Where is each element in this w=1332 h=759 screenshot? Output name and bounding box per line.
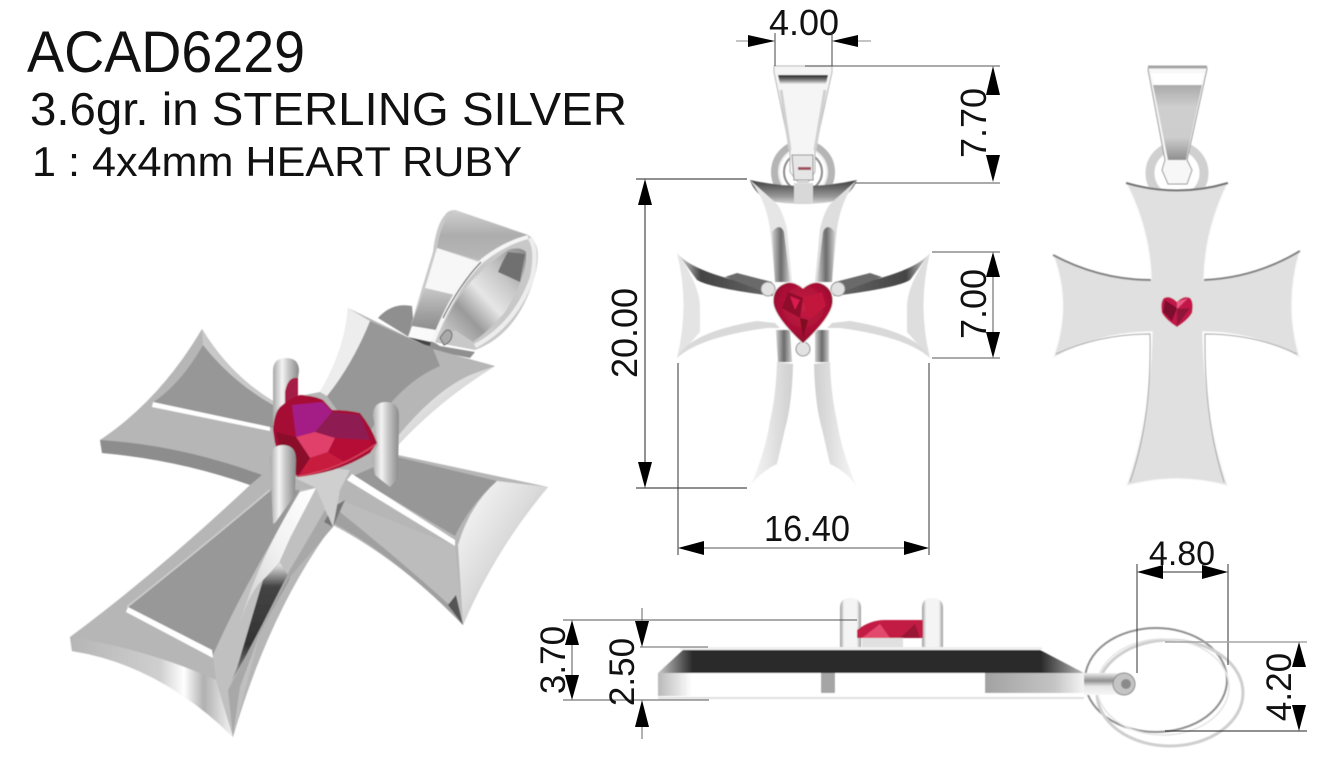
ruby side [857, 620, 923, 647]
front view of the pendant [677, 66, 930, 487]
cross back [1053, 183, 1300, 486]
jump ring behind bail [378, 305, 475, 358]
dimension: overall depth 3.70: 3.70 [534, 626, 573, 694]
left arm [677, 253, 780, 358]
dimension: overall depth 3.70 [534, 620, 857, 700]
body lower band [658, 673, 1084, 699]
lower arm faces [70, 488, 333, 737]
centre base [295, 468, 350, 527]
bail [408, 210, 538, 350]
upper arm faces [320, 308, 495, 445]
dimension: bail width 4.00: 4.00 [769, 2, 839, 43]
peg [1084, 673, 1135, 695]
text: weight and metal: 3.6gr. in STERLING SILVER [30, 83, 627, 135]
dimension: arm height 7.00 [932, 252, 1000, 358]
heart ruby [273, 395, 377, 477]
dimension: body depth 2.50 [603, 608, 708, 739]
front left prong [270, 445, 296, 524]
side prongs [840, 598, 943, 648]
upper stem strips [750, 180, 857, 282]
dimension: bail height 7.70: 7.70 [953, 88, 994, 158]
heart ruby [773, 282, 833, 344]
back prong [273, 358, 299, 425]
right prong [372, 402, 399, 487]
dimension: body depth 2.50: 2.50 [603, 638, 642, 706]
heart ruby [1161, 297, 1193, 327]
dimension: bail depth 4.80: 4.80 [1149, 535, 1215, 573]
dimension: bail width 4.00 [736, 2, 871, 66]
dimension: arm height 7.00: 7.00 [953, 269, 994, 339]
dimension: total height 20.00 [604, 179, 747, 488]
text: stone specification: 1 : 4x4mm HEART RUBY [32, 138, 522, 185]
dimension: bail opening 4.20: 4.20 [1260, 653, 1299, 721]
dimension: bail height 7.70 [805, 66, 1000, 183]
dimension: total height 20.00: 20.00 [604, 288, 645, 378]
side view of the pendant [658, 598, 1243, 746]
dimension: total width 16.40: 16.40 [764, 508, 850, 549]
left arm faces [100, 329, 273, 485]
perspective view of the cross pendant [70, 210, 548, 737]
jump ring [1150, 146, 1204, 200]
right arm faces [324, 457, 548, 625]
back view of the pendant [1053, 66, 1300, 486]
bail [774, 66, 832, 182]
dimension: bail depth 4.80 [1137, 535, 1228, 673]
cross body [70, 308, 548, 737]
body top dark face [658, 650, 1084, 673]
jump ring [775, 144, 831, 200]
side prongs [761, 282, 845, 356]
top bowl [750, 180, 857, 204]
side bail rings [1085, 628, 1243, 746]
dimension: total width 16.40 [678, 363, 929, 555]
bail [1148, 66, 1207, 184]
top rim [680, 647, 1042, 650]
right arm [827, 253, 930, 358]
lower stem strips [750, 330, 857, 487]
title: model number: ACAD6229 [27, 20, 305, 85]
dimension: bail opening 4.20 [1165, 642, 1307, 731]
